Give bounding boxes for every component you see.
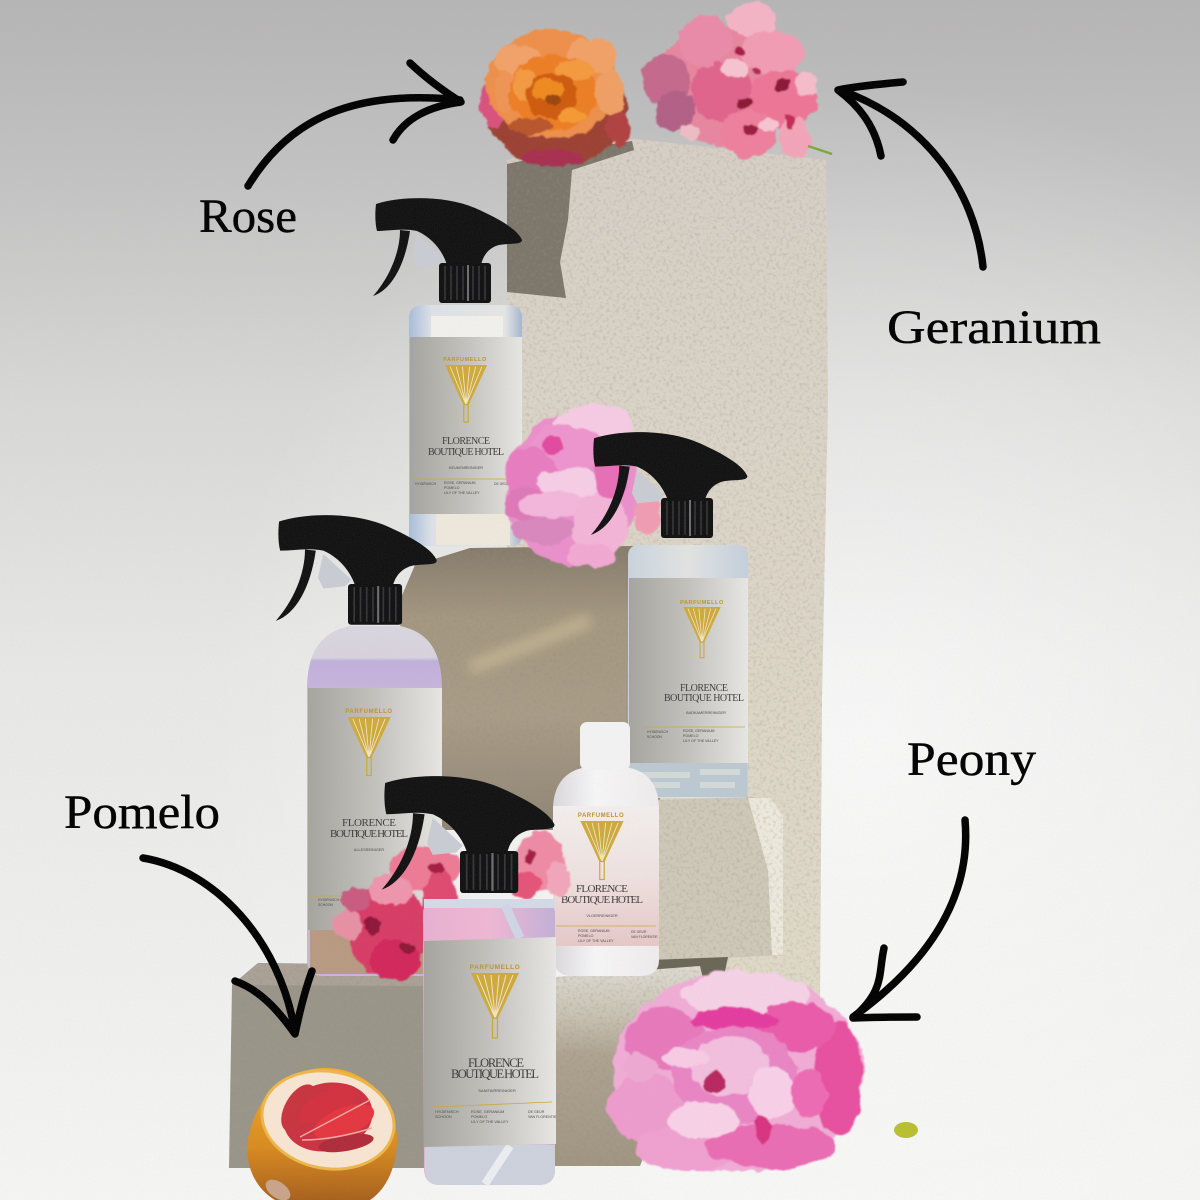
label: SANITAIRREINIGER — [478, 1088, 516, 1093]
label: BADKAMERREINIGER — [686, 711, 726, 715]
label: VAN FLORENTIE — [631, 935, 658, 939]
flower: rose — [481, 30, 630, 167]
label: DE GEUR — [631, 930, 647, 934]
label — [308, 688, 442, 930]
label: FLORENCE — [468, 1056, 524, 1070]
arrow: to pomelo — [143, 858, 312, 1034]
label: Geranium: Geranium — [887, 301, 1101, 354]
label: LILY OF THE VALLEY — [444, 491, 480, 495]
label: POMELO — [471, 1115, 487, 1119]
fruit: halved pomelo — [247, 1059, 404, 1200]
label: FLORENCE — [576, 883, 628, 895]
label: ALLESREINIGER — [354, 848, 384, 852]
cap — [661, 498, 713, 538]
cap — [460, 851, 518, 893]
small yellow petal — [894, 1122, 918, 1138]
label: Pomelo: Pomelo — [64, 786, 220, 839]
bottle: bathroom cleaner — [591, 432, 748, 798]
label: PARFUMELLO — [680, 600, 724, 606]
label: PARFUMELLO — [578, 813, 624, 819]
label: PARFUMELLO — [345, 709, 393, 715]
label: DE GEUR — [494, 482, 510, 486]
lower left concrete block — [229, 963, 430, 1168]
trigger — [276, 515, 437, 621]
label: HYGIËNISCH — [318, 898, 340, 902]
arrow: to peony — [853, 820, 966, 1018]
tall concrete pillar — [507, 138, 828, 1010]
label: KEUKENREINIGER — [449, 466, 483, 470]
bottle: white floor cleaner — [553, 722, 659, 976]
body — [307, 626, 442, 976]
arrow: to rose — [248, 63, 461, 186]
label: SCHOON — [318, 903, 333, 907]
label: Rose: Rose — [199, 190, 297, 243]
arrow: to geranium — [838, 82, 983, 267]
cap — [348, 584, 402, 625]
label: BOUTIQUE HOTEL — [451, 1067, 539, 1081]
label: ROSE, GERANIUM — [683, 729, 715, 733]
label: BOUTIQUE HOTEL — [330, 828, 408, 840]
label: FLORENCE — [680, 683, 728, 694]
white cap — [580, 722, 630, 770]
label: ROSE, GERANIUM — [471, 1110, 504, 1114]
right concrete block — [645, 797, 783, 962]
label: FLORENCE — [342, 817, 396, 829]
label: PARFUMELLO — [443, 357, 487, 363]
label: VAN FLORENTIE — [528, 1115, 557, 1119]
lower right concrete block — [555, 966, 708, 1166]
body — [628, 545, 748, 798]
label: LILY OF THE VALLEY — [683, 739, 719, 743]
label: SCHOON — [435, 1115, 452, 1119]
body — [553, 768, 659, 976]
label: ROSE, GERANIUM — [444, 481, 476, 485]
flower: peony behind bottle — [505, 405, 662, 567]
label: HYGIËNISCH — [647, 730, 669, 734]
label: POMELO — [578, 934, 594, 938]
bottle: sanitary cleaner front — [382, 776, 557, 1185]
bottle: all-purpose cleaner large — [276, 515, 442, 976]
flower: geranium on top of pillar — [642, 2, 818, 158]
label: HYGIËNISCH — [415, 482, 437, 486]
label: PARFUMELLO — [470, 964, 520, 971]
label — [553, 806, 659, 946]
label — [410, 337, 522, 514]
light streak on middle block — [470, 620, 590, 668]
label: LILY OF THE VALLEY — [471, 1120, 509, 1124]
bottle: kitchen cleaner — [373, 198, 522, 546]
shadow under right block — [650, 957, 728, 978]
label — [629, 578, 748, 763]
label: LILY OF THE VALLEY — [578, 939, 614, 943]
label: DE GEUR — [528, 1110, 545, 1114]
cap — [439, 263, 491, 303]
middle concrete block — [400, 546, 660, 830]
body — [423, 899, 555, 1185]
trigger — [591, 432, 747, 535]
trigger — [382, 776, 555, 890]
label: BOUTIQUE HOTEL — [561, 894, 643, 906]
label: BOUTIQUE HOTEL — [428, 447, 504, 458]
label: BOUTIQUE HOTEL — [664, 693, 744, 704]
label: ROSE, GERANIUM — [578, 929, 610, 933]
label: SCHOON — [647, 735, 662, 739]
label: VLOERREINIGER — [586, 914, 618, 918]
label: POMELO — [444, 486, 460, 490]
flower: geranium behind front bottle — [334, 832, 570, 980]
geranium stem — [808, 146, 832, 154]
label: POMELO — [683, 734, 699, 738]
trigger — [373, 198, 522, 296]
label: HYGIËNISCH — [435, 1110, 459, 1114]
label — [424, 937, 557, 1147]
label: Peony: Peony — [907, 733, 1036, 786]
label: FLORENCE — [442, 436, 490, 447]
body — [409, 305, 522, 546]
flower: large peony — [608, 972, 864, 1172]
